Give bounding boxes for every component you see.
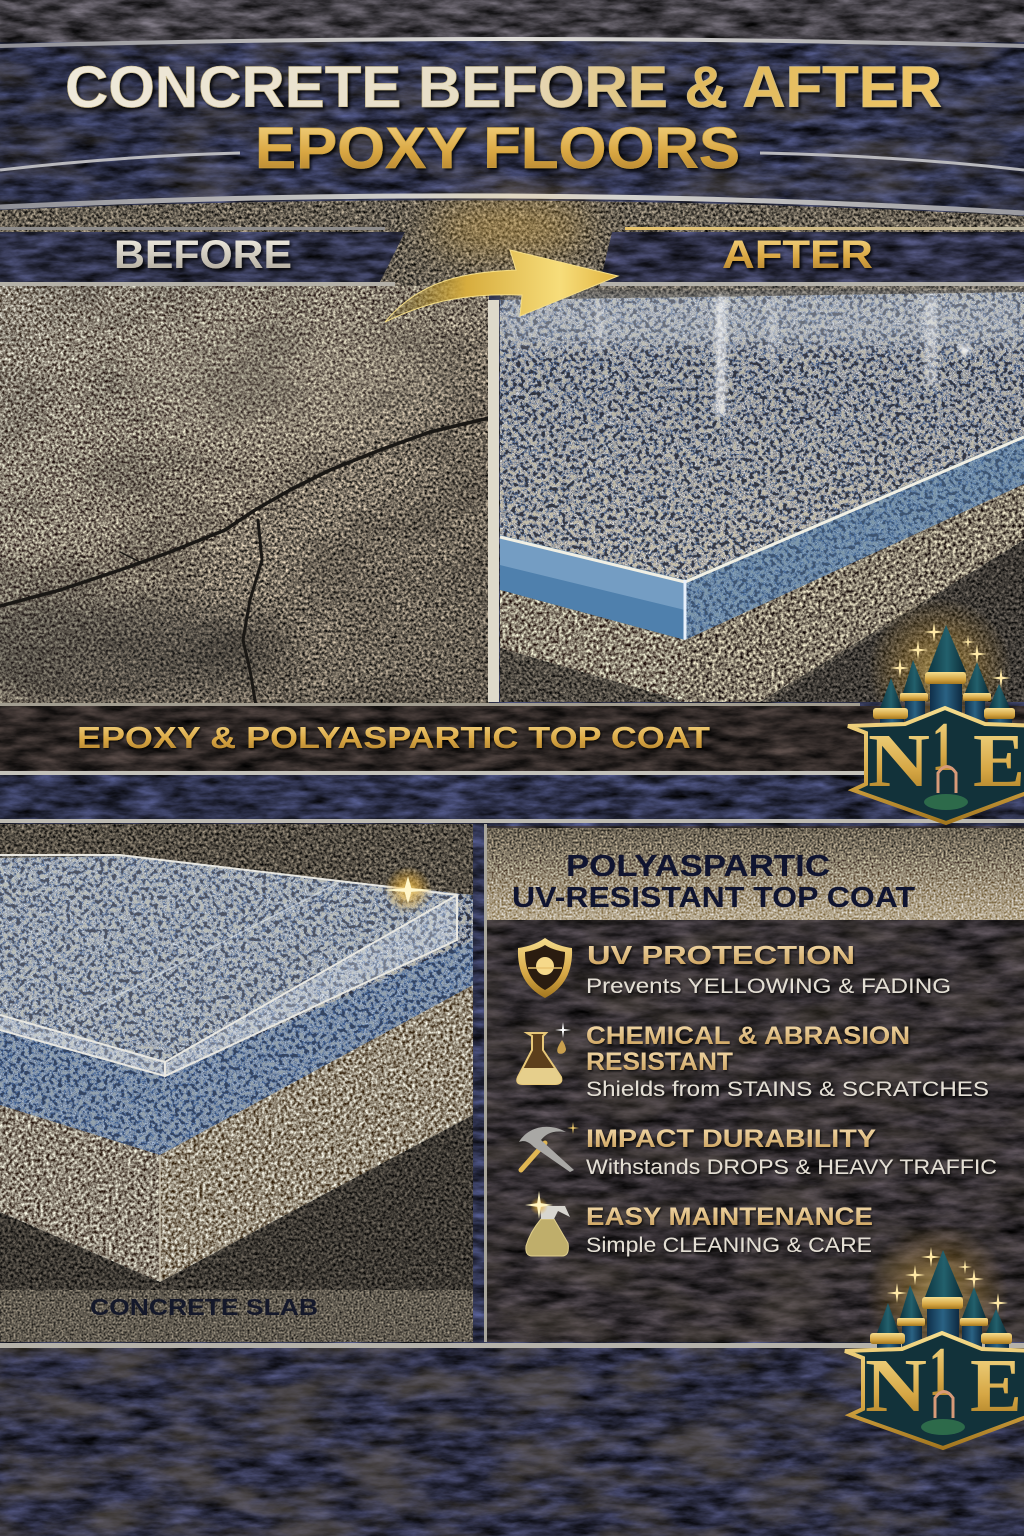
benefit: chemical resistant: Shields from STAINS & SCRATCHES — [586, 1078, 989, 1101]
banner: top coat — [0, 703, 1024, 775]
epoxy flake layer — [0, 856, 473, 1155]
icon: spray bottle — [525, 1191, 570, 1256]
benefit: uv protection — [518, 938, 951, 998]
towers — [873, 625, 1015, 728]
benefit: chemical resistant: RESISTANT — [586, 1048, 733, 1076]
benefit: uv protection: Prevents YELLOWING & FADING — [586, 975, 951, 998]
title: EPOXY FLOORS — [255, 116, 740, 181]
clear sheet — [0, 855, 457, 1062]
separator rule — [0, 819, 1024, 823]
panel: after epoxy slab — [500, 290, 1024, 702]
header band — [0, 0, 1024, 213]
benefit: impact durability: IMPACT DURABILITY — [586, 1125, 876, 1153]
before and after label band — [0, 200, 1024, 290]
concrete slab sides — [500, 590, 685, 702]
logo: lower badge — [845, 1223, 1024, 1448]
lower sparkles — [887, 1247, 1008, 1313]
panel header — [487, 828, 1024, 920]
panel: layered slab cross section — [0, 824, 473, 1342]
panel header: POLYASPARTIC — [566, 848, 830, 883]
clear coat band — [500, 535, 685, 640]
logo: upper badge — [848, 598, 1024, 823]
banner text: EPOXY & POLYASPARTIC TOP COAT — [77, 720, 710, 755]
panel: before cracked concrete — [0, 286, 489, 706]
lower logo lettering: E — [970, 1344, 1022, 1428]
sparkle — [384, 866, 432, 914]
arrow: before to after — [385, 250, 618, 322]
benefit: easy maintenance: Simple CLEANING & CARE — [586, 1234, 872, 1257]
divider — [488, 300, 499, 702]
benefit: easy maintenance — [525, 1191, 873, 1257]
concrete slab — [0, 1105, 160, 1282]
title: CONCRETE BEFORE & AFTER — [65, 55, 942, 120]
title — [65, 55, 942, 181]
benefit: chemical resistant: CHEMICAL & ABRASION — [586, 1022, 910, 1050]
panel header: UV-RESISTANT TOP COAT — [512, 882, 915, 914]
benefit: impact durability — [519, 1122, 997, 1179]
lower logo lettering: N — [865, 1344, 927, 1428]
reflections — [596, 296, 970, 416]
benefit: easy maintenance: EASY MAINTENANCE — [586, 1203, 873, 1231]
icon: hammer — [519, 1122, 579, 1172]
panel: top coat benefits — [484, 824, 1024, 1342]
sparkles — [890, 622, 1011, 688]
slab label: CONCRETE SLAB — [90, 1294, 318, 1320]
after label: AFTER — [722, 233, 873, 277]
lower shield — [845, 1333, 1024, 1448]
shield — [848, 708, 1024, 823]
icon: shield — [518, 938, 572, 998]
benefit: chemical resistant — [517, 1022, 989, 1101]
crack lines — [0, 418, 489, 706]
lower logo lettering — [865, 1334, 1022, 1428]
icon: flask — [517, 1022, 571, 1084]
logo lettering: E — [973, 719, 1024, 803]
benefit: impact durability: Withstands DROPS & HEAVY TRAFFIC — [586, 1156, 997, 1179]
lower towers — [870, 1250, 1012, 1353]
logo lettering — [868, 709, 1024, 803]
benefit: uv protection: UV PROTECTION — [587, 940, 855, 970]
lower logo lettering: 1 — [929, 1334, 951, 1411]
before label: BEFORE — [114, 233, 292, 277]
epoxy surface — [500, 292, 1024, 580]
logo lettering: N — [868, 719, 930, 803]
logo lettering: 1 — [932, 709, 954, 786]
footer band — [0, 1343, 1024, 1536]
